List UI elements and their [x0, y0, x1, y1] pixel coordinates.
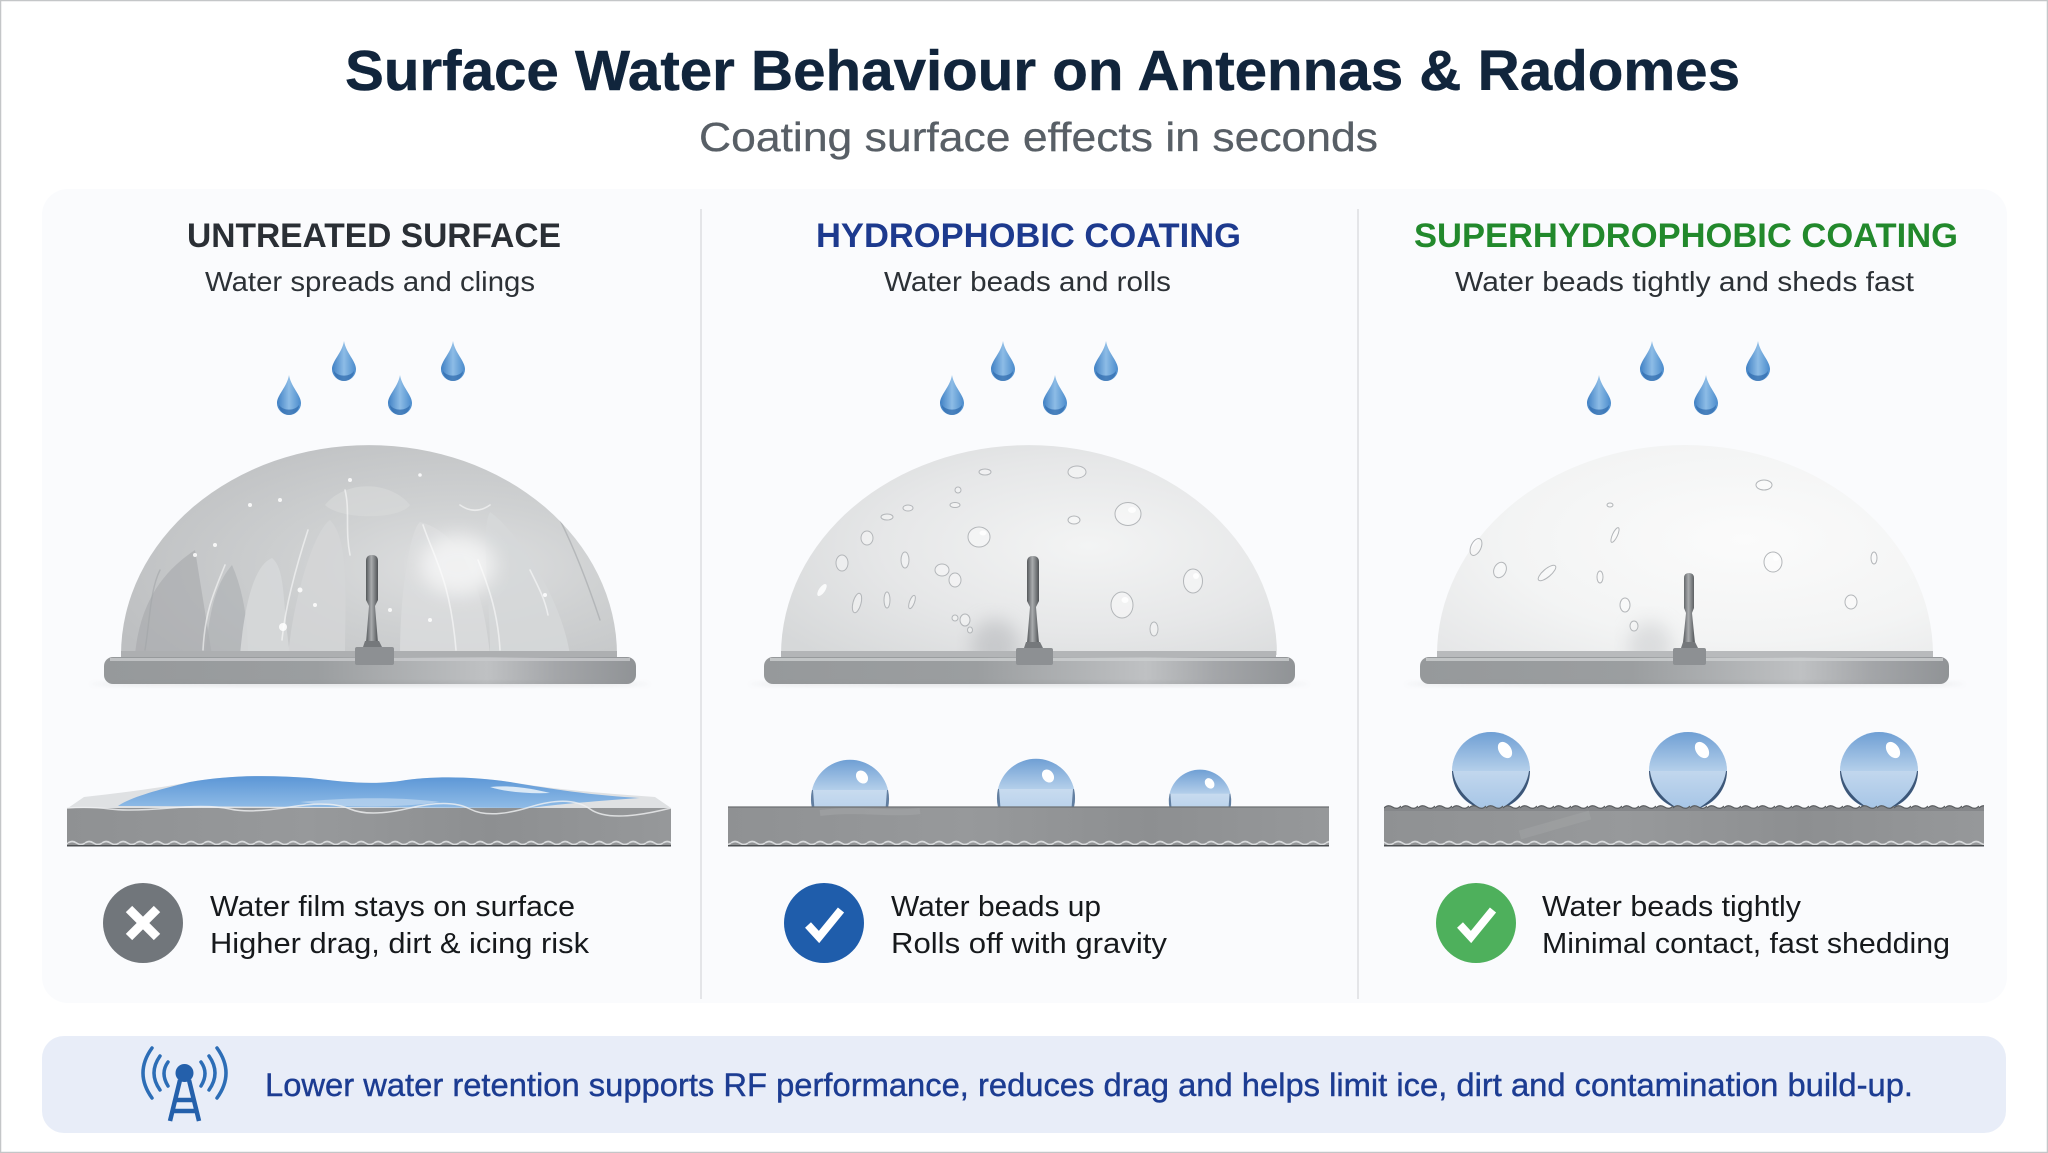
- comparison panel background: [42, 189, 2007, 1003]
- antenna base plate: [121, 651, 617, 659]
- callout text: Lower water retention supports RF performance, reduces drag and helps limit ice, dirt and contamination build-up.: [265, 1067, 1913, 1103]
- antenna pin: [366, 555, 378, 643]
- antenna base plate: [781, 651, 1276, 659]
- icon: falling water drops: [1587, 341, 1770, 415]
- heading: hydrophobic coating: HYDROPHOBIC COATING: [816, 217, 1241, 255]
- outcome text: [891, 891, 1168, 960]
- surface cross-section with water film: [67, 776, 671, 846]
- outcome text: Higher drag, dirt & icing risk: [210, 928, 590, 960]
- outcome text: [1542, 891, 1950, 960]
- radome with water film: [90, 445, 650, 686]
- icon: falling water drops: [940, 341, 1118, 415]
- icon: cross: [103, 883, 183, 963]
- icon: blue check: [784, 883, 864, 963]
- subheading: Water spreads and clings: [205, 266, 535, 297]
- outcome text: Minimal contact, fast shedding: [1542, 928, 1950, 960]
- panel: untreated surface: [67, 217, 671, 963]
- icon: antenna tower: [143, 1048, 226, 1121]
- subheading: Water beads and rolls: [884, 266, 1171, 297]
- antenna base plate: [1437, 651, 1933, 659]
- panel: superhydrophobic coating: [1384, 217, 1984, 963]
- icon: falling water drops: [277, 341, 465, 415]
- antenna pin: [1683, 573, 1695, 643]
- outcome text: Rolls off with gravity: [891, 928, 1168, 960]
- subtitle: Coating surface effects in seconds: [699, 114, 1378, 160]
- icon: green check: [1436, 883, 1516, 963]
- callout banner: [42, 1036, 2006, 1133]
- outcome text: [210, 891, 590, 960]
- radome with few water beads: [1405, 445, 1965, 686]
- outcome text: Water beads tightly: [1542, 891, 1802, 923]
- heading: superhydrophobic coating: SUPERHYDROPHOBIC COATING: [1414, 217, 1958, 255]
- antenna pin: [1027, 556, 1039, 643]
- outcome text: Water film stays on surface: [210, 891, 575, 923]
- radome with water beads: [749, 445, 1309, 686]
- surface cross-section with round beads: [1384, 732, 1984, 846]
- subheading: Water beads tightly and sheds fast: [1455, 266, 1914, 297]
- heading: untreated surface: UNTREATED SURFACE: [187, 217, 561, 255]
- title: Surface Water Behaviour on Antennas & Radomes: [345, 39, 1740, 103]
- outcome text: Water beads up: [891, 891, 1101, 923]
- surface cross-section with water beads: [728, 759, 1329, 846]
- panel: hydrophobic coating: [728, 217, 1329, 963]
